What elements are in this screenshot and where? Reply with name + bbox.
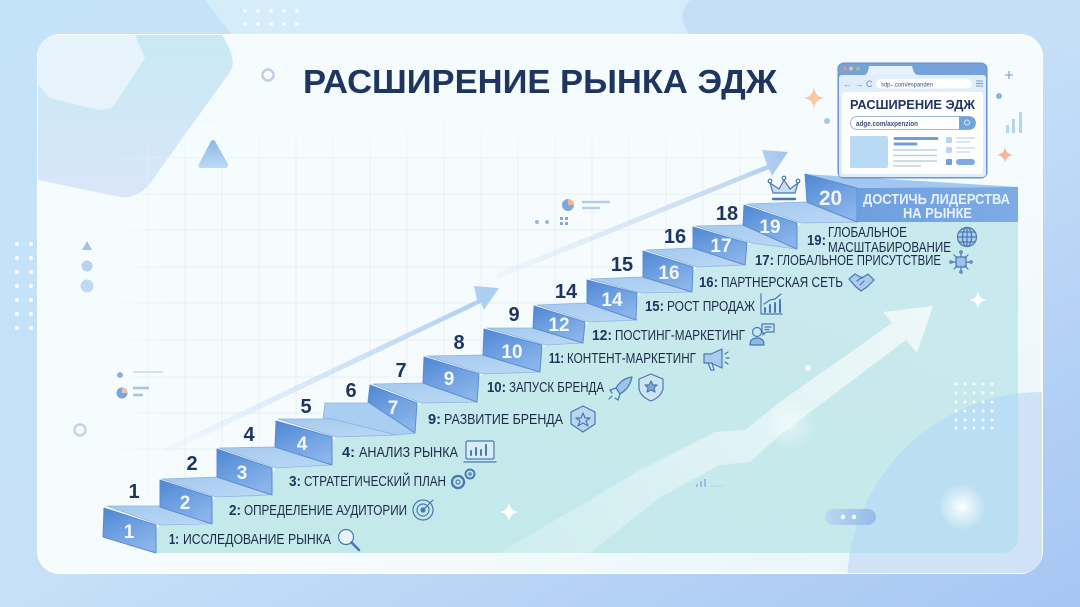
step 5 light tread [323,403,415,435]
label 3: strategic plan: 3: [289,474,301,490]
browser address bar: ← → C [843,79,873,89]
step 1: 1 [124,522,135,543]
arrow: large white trend arrow [500,306,933,553]
label 16: partner network: 16: [699,275,718,291]
step 16 [643,248,745,292]
arrow: lower light blue [160,286,499,452]
label 12: posting marketing: ПОСТИНГ-МАРКЕТИНГ [615,328,745,344]
decoration: around browser [803,71,1022,163]
step 4 [275,419,397,465]
numbers above the stairs: 18 [716,203,738,225]
icon: rocket [609,377,632,400]
step 10 [483,328,583,372]
icon: handshake [849,274,874,291]
numbers above the stairs: 8 [453,332,465,354]
browser address bar: sdp₊.com/espanden [881,82,933,88]
numbers above the stairs: 15 [611,254,633,276]
label 3: strategic plan: СТРАТЕГИЧЕСКИЙ ПЛАН [304,472,446,490]
icon: growth chart [761,294,782,314]
icon: magnifier [338,530,359,550]
numbers above the stairs: 9 [508,304,520,326]
label 1: market research: 1: [169,532,179,548]
step 14 [587,277,692,320]
browser page [842,92,983,174]
label 3: strategic plan [289,472,446,490]
decoration: small pie and legend centre [535,199,610,225]
step 20 block: 20 [819,187,842,210]
icon: shield [639,374,663,401]
icon: target [413,500,433,520]
decoration: bottom right quarter circle [850,394,1018,553]
label 4: market analysis: 4: [342,445,355,461]
step 4: 4 [297,434,308,455]
browser address bar [839,75,986,177]
label 17: global presence: 17: [755,253,774,269]
label 15: sales growth: РОСТ ПРОДАЖ [667,299,755,315]
step 20 block: НА РЫНКЕ [903,205,972,222]
icon: crown [768,176,800,199]
title: РАСШИРЕНИЕ РЫНКА ЭДЖ [303,63,777,100]
icon: globe [958,228,976,246]
step 17: 17 [710,236,732,257]
label 19: global scaling: 19: [807,233,826,249]
arrow: upper light blue [495,150,788,279]
browser content block [850,136,975,168]
label 11: content marketing: КОНТЕНТ-МАРКЕТИНГ [567,351,696,367]
icon: gears [452,470,474,488]
label 10: brand launch: 10: [487,380,506,396]
label 16: partner network: ПАРТНЕРСКАЯ СЕТЬ [721,275,843,291]
icon: shield star [571,406,595,432]
step 17 [693,225,797,265]
label 2: audience: 2: [229,503,241,519]
staircase [103,174,1018,553]
step 9: 9 [444,369,454,390]
numbers above the stairs: 5 [300,396,312,418]
step 1 [103,506,212,553]
label 10: brand launch [487,380,604,396]
background grid [141,144,778,488]
decoration: small pie and legend left [116,372,163,398]
numbers above the stairs: 16 [664,226,686,248]
icon: person with chat [750,324,774,345]
label 9: brand development: РАЗВИТИЕ БРЕНДА [444,412,563,428]
numbers above the stairs: 4 [243,424,255,446]
step 10: 10 [501,342,523,363]
step 7 [368,383,477,433]
icon: megaphone [704,349,729,370]
numbers above the stairs [128,203,738,503]
numbers above the stairs: 2 [186,453,198,475]
label 9: brand development: 9: [428,412,441,428]
label 12: posting marketing: 12: [592,328,612,344]
numbers above the stairs: 14 [555,281,578,303]
browser search box: adge.com/axpenzion [856,119,918,128]
icon: network chip [950,251,972,273]
label 2: audience: ОПРЕДЕЛЕНИЕ АУДИТОРИИ [244,503,407,519]
label 19: global scaling [807,225,951,256]
decoration: mint area ornaments [499,291,994,531]
step 14: 14 [601,290,623,311]
label 1: market research: ИССЛЕДОВАНИЕ РЫНКА [183,532,331,548]
background dots: top [243,9,299,26]
step 16: 16 [658,263,680,284]
label 17: global presence: ГЛОБАЛЬНОЕ ПРИСУТСТВИЕ [777,253,941,269]
decoration: left shapes [74,70,274,436]
step 7: 7 [388,398,398,419]
numbers above the stairs: 7 [395,360,407,382]
label 15: sales growth [645,299,755,315]
browser tab strip [843,66,918,75]
step 20 block: ДОСТИЧЬ ЛИДЕРСТВА [863,191,1010,208]
label 19: global scaling: ГЛОБАЛЬНОЕ [828,225,907,241]
label 19: global scaling: МАСШТАБИРОВАНИЕ [828,240,951,256]
step 12 [533,303,637,343]
mint panel under stairs [156,222,1018,553]
step 2: 2 [180,493,190,514]
step 3: 3 [237,463,247,484]
label 4: market analysis: АНАЛИЗ РЫНКА [359,445,458,461]
browser heading: РАСШИРЕНИЕ ЭДЖ [850,97,975,112]
step 2 [160,477,272,524]
label 10: brand launch: ЗАПУСК БРЕНДА [509,380,604,396]
step 12: 12 [548,315,570,336]
numbers above the stairs: 6 [345,380,357,402]
label 11: content marketing: 11: [549,351,564,367]
browser window [838,63,987,178]
step 19: 19 [759,217,781,238]
label 15: sales growth: 15: [645,299,664,315]
step 9 [423,355,540,402]
step 19 [743,202,857,249]
background dots: left [15,242,33,330]
browser search box [850,116,976,130]
step 3 [217,447,332,495]
numbers above the stairs: 1 [128,481,140,503]
icon: chart screen [464,441,496,462]
step 20 block [805,174,1018,222]
